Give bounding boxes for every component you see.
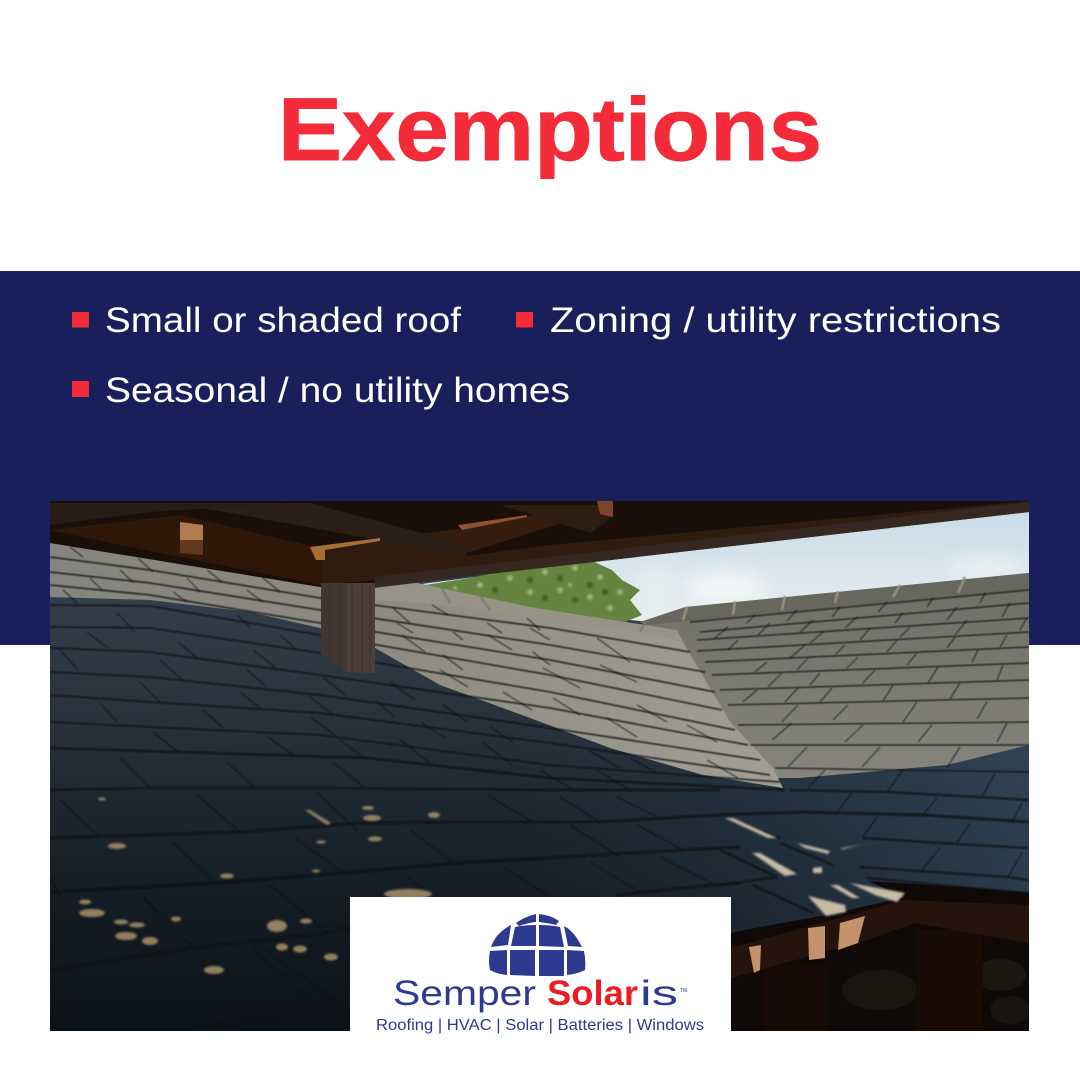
wordmark: Semper: Semper — [393, 974, 536, 1013]
title: Exemptions — [278, 79, 822, 179]
bullet: small or shaded roof: Small or shaded roof — [105, 301, 461, 340]
title and bullet text — [72, 79, 1001, 410]
wooden post — [321, 583, 375, 673]
tagline: Roofing | HVAC | Solar | Batteries | Windows — [376, 1017, 704, 1034]
sky — [422, 512, 1029, 622]
shaded roof base — [50, 574, 1029, 1031]
dappled sunlight spots — [79, 798, 440, 974]
tree — [425, 560, 642, 622]
beam sun patches — [180, 501, 613, 560]
sunlit patches on eave beam — [749, 916, 865, 973]
logo card — [350, 897, 731, 1031]
sunlit right roof — [640, 573, 1029, 778]
wood and stone under the eave — [722, 881, 1030, 1031]
sunlight streaks on tiles — [725, 818, 905, 916]
navy band — [0, 271, 1080, 645]
sunlit left roof — [50, 543, 783, 788]
roof tile side gaps — [50, 547, 1027, 1011]
roof tile row lines — [50, 557, 1029, 1028]
icon: solar dome — [489, 914, 585, 976]
roof photograph illustration — [50, 501, 1029, 1031]
overhead wooden beam — [50, 501, 1029, 587]
bullet: seasonal / no utility homes: Seasonal / no utility homes — [105, 371, 570, 410]
trademark: TM — [680, 988, 687, 994]
wordmark: is: is — [640, 974, 678, 1013]
Semper Solaris logo — [376, 914, 704, 1034]
bullet: zoning / utility restrictions: Zoning / utility restrictions — [550, 301, 1001, 340]
wordmark: Solar: Solar — [547, 974, 638, 1013]
